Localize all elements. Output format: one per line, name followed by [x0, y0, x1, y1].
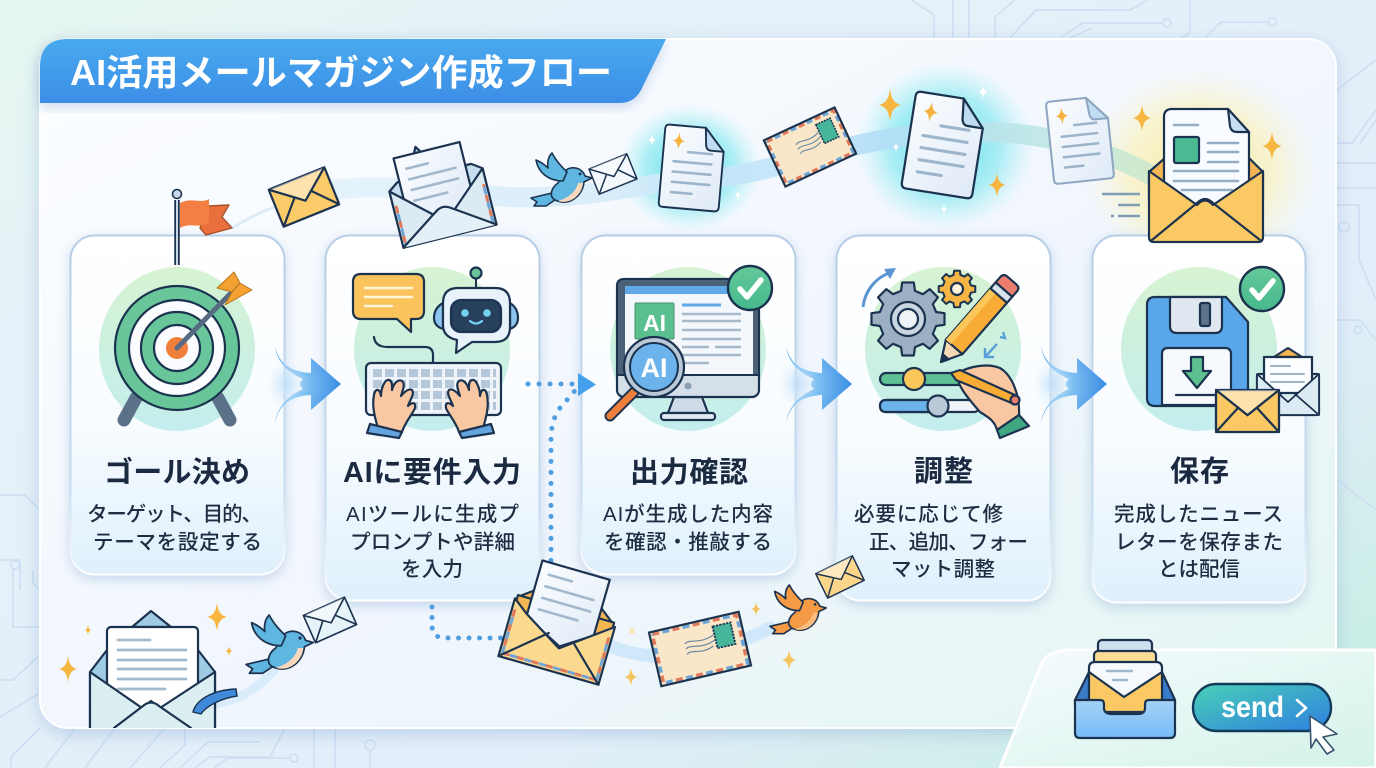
postcard 1	[764, 107, 856, 187]
card 1	[70, 236, 284, 574]
card text: AIに要件入力: AIツールに生成プ	[346, 503, 520, 526]
card text: 保存: 保存	[1170, 455, 1229, 488]
arrow 3	[1032, 346, 1107, 423]
icon: pencil	[933, 273, 1020, 369]
document 2	[901, 91, 987, 199]
icon: check badge	[728, 266, 772, 310]
card 5	[1092, 236, 1319, 602]
card 2	[326, 236, 540, 600]
send button	[1193, 684, 1331, 731]
blue bird with envelope	[246, 597, 357, 673]
card text: 出力確認: 出力確認	[630, 456, 748, 489]
card text: ゴール決め: ゴール決め	[104, 455, 250, 489]
cursor	[1310, 716, 1337, 754]
card text: AIに要件入力: を入力	[401, 558, 463, 581]
icon: monitor: AI	[643, 310, 666, 336]
card text: 出力確認	[603, 456, 773, 554]
icon: monitor	[617, 279, 759, 420]
orange bird with envelope	[770, 556, 864, 634]
icon background	[865, 267, 1021, 431]
icon: magnifier: AI	[640, 353, 668, 383]
card text: ゴール決め	[87, 455, 262, 554]
flag	[172, 190, 232, 265]
icon: floppy disk	[1147, 297, 1248, 406]
card text: AIに要件入力	[343, 456, 521, 581]
icon: magnifier	[610, 337, 684, 416]
lower-left open envelope	[90, 611, 237, 740]
sparkles: lower left	[59, 603, 233, 682]
header banner	[40, 39, 666, 103]
icon background	[99, 267, 255, 431]
card text: 調整: マット調整	[891, 558, 995, 581]
lower dotted path	[432, 607, 506, 638]
card text: AIに要件入力: プロンプトや詳細	[350, 531, 515, 554]
icon background	[610, 267, 766, 431]
document 3	[1046, 96, 1114, 184]
inbox tray icon	[1075, 640, 1175, 738]
bird carrying envelope	[531, 153, 637, 206]
open envelope with letter	[498, 556, 627, 685]
curved blue arrow	[193, 689, 237, 714]
card text: 調整: 必要に応じて修	[854, 503, 1004, 526]
arrow 2	[777, 346, 852, 423]
card text: 保存: レターを保存また	[1115, 531, 1283, 554]
icon: target with arrow	[115, 272, 252, 420]
icon: chat bubble	[353, 274, 424, 332]
icon: sliders	[880, 368, 980, 416]
arrow: dotted branch	[528, 373, 596, 572]
card text: 出力確認: AIが生成した内容	[603, 503, 773, 526]
card text: ゴール決め: ターゲット、目的、	[87, 503, 262, 526]
card text: 調整	[854, 455, 1028, 581]
icon background	[1121, 267, 1277, 431]
card text: AIに要件入力: AIに要件入力	[343, 456, 521, 489]
icon: hand holding pencil	[951, 365, 1029, 438]
icon background	[354, 267, 510, 431]
speed lines	[1102, 194, 1140, 216]
card text: 出力確認: を確認・推敲する	[604, 531, 772, 554]
open airmail envelope	[380, 132, 497, 248]
bottom flow ribbon	[214, 628, 770, 704]
send button: send	[1221, 691, 1284, 724]
icon: robot	[434, 268, 518, 353]
icon: gears	[863, 268, 1005, 357]
card 4	[836, 236, 1050, 600]
sparkles: top	[648, 85, 1282, 214]
document 1	[658, 124, 726, 212]
card text: 保存	[1114, 455, 1283, 581]
card text: 調整: 調整	[914, 455, 973, 488]
glow: documents and envelope	[618, 62, 1318, 272]
footer panel	[1000, 650, 1376, 768]
title: AI活用メールマガジン作成フロー	[70, 52, 612, 93]
postcard 2	[649, 612, 751, 686]
sparkles: lower middle	[625, 602, 796, 686]
top flow ribbon	[232, 132, 1160, 228]
yellow envelope	[269, 167, 339, 227]
card 3	[582, 236, 796, 574]
card text: ゴール決め: テーマを設定する	[93, 531, 262, 554]
main envelope with newsletter	[1149, 109, 1263, 242]
card text: 保存: 完成したニュース	[1114, 503, 1283, 526]
icon: keyboard and hands	[366, 337, 501, 438]
icon: check badge	[1240, 267, 1284, 311]
card text: 保存: とは配信	[1158, 558, 1240, 581]
arrow 1	[266, 346, 341, 423]
card text: 調整: 正、追加、フォー	[869, 531, 1028, 554]
icon: stacked envelopes	[1216, 348, 1319, 432]
